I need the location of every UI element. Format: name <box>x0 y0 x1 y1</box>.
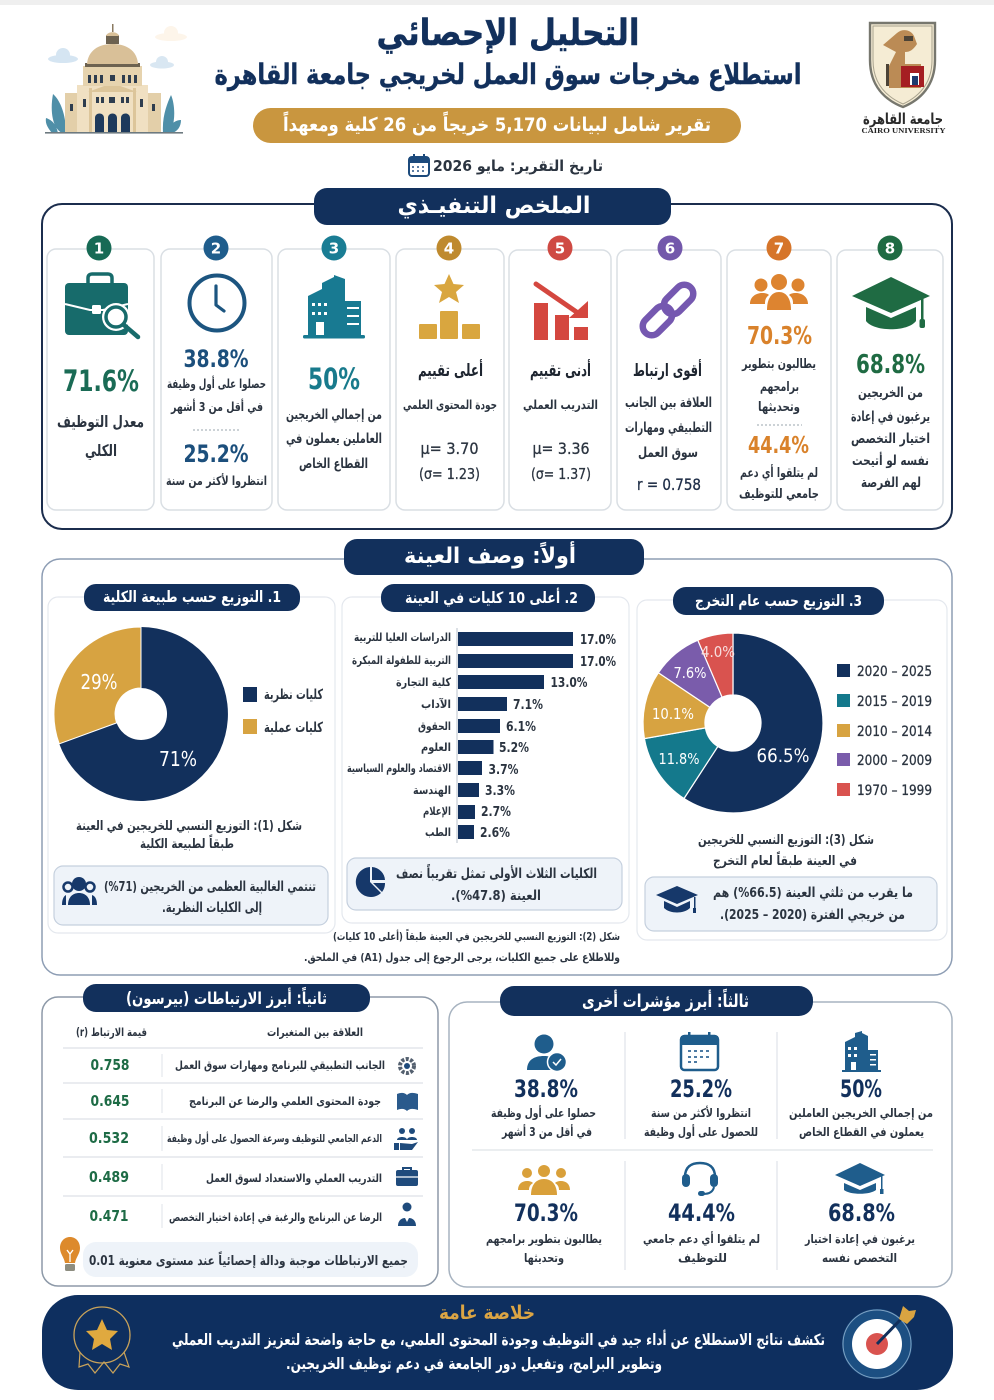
heading: sample description <box>344 539 644 575</box>
icon: calendar <box>409 154 429 176</box>
callout: two thirds recent graduates <box>645 877 937 931</box>
callout: top three colleges <box>347 858 622 910</box>
text: would re-choose specialisation: من الخريجين <box>858 385 923 401</box>
bar chart: top ten colleges: 2.6% <box>480 825 510 841</box>
label: overall employment: معدل التوظيف <box>57 412 144 431</box>
heading: pearson correlations: ثانياً: أبرز الارتباطات (بيرسون) <box>126 986 327 1009</box>
chart panel 3: by graduation year <box>637 587 947 940</box>
icon: user with check <box>527 1034 566 1072</box>
bar chart: top ten colleges: الحقوق <box>418 719 451 734</box>
text: first job within three months <box>167 375 266 414</box>
indicator: re-choose specialisation 68.8%: يرغبون في إعادة اختيار <box>804 1232 915 1247</box>
heading: pearson correlations <box>83 984 370 1012</box>
label: scientific content quality: جودة المحتوى العلمي <box>403 397 497 412</box>
heading: executive summary: الملخص التنفيـذي <box>398 193 590 219</box>
card 2: time to first job: 2 <box>211 240 221 258</box>
icon: light bulb <box>60 1237 80 1271</box>
icon: briefcase <box>396 1168 418 1186</box>
caption: figure 1 <box>76 819 302 852</box>
heading: by graduation year <box>673 587 884 615</box>
row: content quality and satisfaction: 0.645 <box>90 1092 130 1110</box>
illustration: university building <box>45 24 187 134</box>
card 6: strongest correlation <box>617 236 721 510</box>
card 5: lowest rating <box>509 236 611 510</box>
indicator: program development 70.3%: يطالبون بتطوير برامجهم <box>486 1232 602 1247</box>
row: satisfaction and re-choosing: الرضا عن البرنامج والرغبة في إعادة اختيار التخصص <box>169 1211 382 1224</box>
callout: top three colleges: الكليات الثلاث الأولى تمثل تقريباً نصف <box>396 863 597 882</box>
footnote: figure 2 <box>304 929 620 964</box>
row: satisfaction and re-choosing <box>90 1202 416 1226</box>
gold subtitle pill: تقرير شامل لبيانات 5,170 خريجاً من 26 كلية ومعهداً <box>283 111 711 136</box>
bar chart: top ten colleges: 17.0% <box>580 654 616 670</box>
card 6: strongest correlation: 6 <box>665 240 675 258</box>
legend: college type: كليات نظرية <box>264 687 324 703</box>
value: 70.3%: 70.3% <box>747 321 812 350</box>
row: practical side and market skills: الجانب التطبيقي للبرنامج ومهارات سوق العمل <box>175 1058 385 1073</box>
indicator: first job within three months 38.8%: حصلوا على أول وظيفة <box>491 1105 596 1121</box>
bar chart: top ten colleges <box>347 628 616 843</box>
value: 50%: 50% <box>308 362 360 396</box>
callout: top three colleges: العينة (47.8%). <box>451 888 541 904</box>
stats: mean and deviation <box>419 439 480 483</box>
text: first job within three months: حصلوا على أول وظيفة <box>167 375 266 391</box>
row: practical side and market skills: 0.758 <box>90 1056 130 1074</box>
indicator: private sector 50%: يعملون في القطاع الخاص <box>799 1125 924 1140</box>
text: first job within three months: في أقل من 3 أشهر <box>170 398 263 414</box>
bar chart: top ten colleges: الهندسة <box>413 783 451 797</box>
donut chart: graduation year: 10.1% <box>652 705 694 723</box>
caption: figure 1: طبقاً لطبيعة الكلية <box>140 834 234 852</box>
heading: other key indicators: ثالثاً: أبرز مؤشرات أخرى <box>582 988 749 1012</box>
stats: mean and deviation: (σ= 1.23) <box>419 465 480 483</box>
title: التحليل الإحصائي <box>376 13 640 54</box>
indicator: private sector 50% <box>789 1031 933 1140</box>
logo arabic name: جامعة القاهرة <box>863 110 943 128</box>
panel: other key indicators <box>449 986 952 1287</box>
legend: graduation year: 2020 – 2025 <box>857 664 932 680</box>
icon: graduation cap <box>835 1163 885 1194</box>
legend: college type: كليات عملية <box>264 720 324 736</box>
indicator: re-choose specialisation 68.8%: 68.8% <box>828 1199 895 1227</box>
icon: chain link <box>639 281 697 339</box>
callout: two thirds recent graduates: من خريجي الفترة (2020 – 2025). <box>720 907 905 923</box>
caption: figure 1: شكل (1): التوزيع النسبي للخريجين في العينة <box>76 819 302 834</box>
bar chart: top ten colleges: العلوم <box>421 740 451 755</box>
logo: Cairo University <box>862 23 946 135</box>
donut chart: graduation year: 11.8% <box>658 750 700 768</box>
card 5: lowest rating: 5 <box>555 240 565 258</box>
text: conclusion <box>172 1330 825 1374</box>
indicator: no university support 44.4% <box>643 1163 760 1266</box>
stats: mean and deviation: (σ= 1.37) <box>531 465 591 483</box>
icon: open book <box>397 1093 418 1111</box>
card 2: time to first job <box>161 236 272 510</box>
text: practical side and labour market skills: سوق العمل <box>638 445 698 461</box>
bar chart: top ten colleges: التربية للطفولة المبكرة <box>352 653 451 668</box>
card 7: program development: 7 <box>774 240 784 258</box>
callout: theoretical majority <box>54 866 328 925</box>
stats: mean and deviation: μ= 3.70 <box>420 439 478 458</box>
card 3: private sector <box>278 236 390 510</box>
heading: sample description: أولاً: وصف العينة <box>404 540 576 569</box>
donut chart: graduation year: 7.6% <box>674 664 706 682</box>
donut chart: graduation year <box>643 633 823 813</box>
report date: تاريخ التقرير: مايو 2026 <box>433 157 603 175</box>
indicator: waited over a year 25.2%: للحصول على أول وظيفة <box>644 1124 758 1140</box>
caption: figure 3: شكل (3): التوزيع النسبي للخريجين <box>698 833 874 848</box>
indicator: re-choose specialisation 68.8% <box>804 1163 915 1265</box>
legend: graduation year: 1970 – 1999 <box>857 783 932 799</box>
logo english name: CAIRO UNIVERSITY <box>862 126 946 135</box>
indicator: waited over a year 25.2%: انتظروا لأكثر من سنة <box>651 1105 751 1121</box>
text: would re-choose specialisation: لهم الفرصة <box>861 475 921 491</box>
bar chart: top ten colleges: الطب <box>425 825 451 839</box>
text: conclusion: وتطوير البرامج، وتفعيل دور الجامعة في دعم توظيف الخريجين. <box>286 1355 662 1374</box>
donut chart: college type <box>54 627 228 801</box>
table header <box>76 1025 363 1039</box>
icon: clock <box>190 276 244 330</box>
text: demand program development <box>741 357 816 415</box>
bar chart: top ten colleges: 3.7% <box>488 762 519 778</box>
row: practical training and readiness: 0.489 <box>89 1168 129 1186</box>
icon: award badge <box>74 1307 130 1373</box>
card 4: highest rating <box>396 236 504 510</box>
panel: executive summary <box>42 188 952 529</box>
row: university support and time to job: 0.532 <box>89 1129 129 1147</box>
row: university support and time to job <box>89 1128 418 1150</box>
footnote: figure 2: شكل (2): التوزيع النسبي للخريجين في العينة طبقاً (أعلى 10 كليات) <box>333 929 620 943</box>
indicator: program development 70.3%: 70.3% <box>514 1199 578 1227</box>
legend: college type <box>243 687 324 736</box>
chart panel 2: top ten colleges <box>304 584 629 964</box>
text: practical side and labour market skills <box>625 395 712 461</box>
icon: calendar <box>681 1032 718 1070</box>
icon: graduation cap <box>656 886 698 913</box>
indicator: no university support 44.4%: لم يتلقوا أي دعم جامعي <box>643 1231 760 1247</box>
label continuation: الكلي <box>85 441 117 461</box>
heading: lowest rating: أدنى تقييم <box>530 359 591 381</box>
text: private sector share <box>286 407 382 472</box>
text: would re-choose specialisation: نفسه لو أتيحت <box>852 452 929 469</box>
card 4: highest rating: 4 <box>444 240 454 258</box>
heading: other key indicators <box>500 986 813 1016</box>
legend: graduation year <box>837 664 932 799</box>
icon: gear <box>400 1059 414 1073</box>
legend: graduation year: 2015 – 2019 <box>857 694 932 710</box>
heading: top ten colleges: 2. أعلى 10 كليات في العينة <box>405 588 578 608</box>
row: university support and time to job: الدعم الجامعي للتوظيف وسرعة الحصول على أول وظيفة <box>167 1131 382 1145</box>
card 8: re-choosing specialisation: 8 <box>885 240 895 258</box>
card 8: re-choosing specialisation <box>837 236 943 510</box>
stats: mean and deviation: μ= 3.36 <box>532 439 590 458</box>
note: significance <box>60 1237 418 1277</box>
bar chart: top ten colleges: 3.3% <box>485 783 515 799</box>
panel: pearson correlations <box>42 984 438 1286</box>
card 7: program development <box>727 236 831 510</box>
bar chart: top ten colleges: 17.0% <box>580 632 616 648</box>
icon: graduation cap <box>852 277 930 329</box>
indicator: private sector 50%: من إجمالي الخريجين العاملين <box>789 1106 933 1120</box>
donut chart: college type: 71% <box>159 747 197 771</box>
icon: buildings <box>842 1031 881 1072</box>
value: 25.2%: 25.2% <box>184 440 248 468</box>
value: 71.6%: 71.6% <box>63 364 139 398</box>
text: waited over a year: انتظروا لأكثر من سنة <box>166 473 267 488</box>
heading: conclusion: خلاصة عامة <box>439 1302 535 1324</box>
indicator: program development 70.3% <box>486 1165 602 1266</box>
heading: by college type: 1. التوزيع حسب طبيعة الكلية <box>103 588 281 606</box>
indicator: private sector 50%: 50% <box>840 1075 882 1103</box>
value: 38.8%: 38.8% <box>184 345 248 373</box>
icon: star podium <box>419 274 480 339</box>
indicator: program development 70.3%: وتحديثها <box>524 1251 564 1266</box>
heading: by college type <box>84 584 300 611</box>
bar chart: top ten colleges: 6.1% <box>506 719 536 735</box>
icon: falling chart <box>534 284 588 340</box>
bar chart: top ten colleges: الاقتصاد والعلوم السياسية <box>347 761 451 776</box>
icon: graduate group <box>398 1202 416 1226</box>
bar chart: top ten colleges: 13.0% <box>550 675 588 691</box>
text: no university support <box>739 464 819 502</box>
icon: people <box>518 1165 570 1195</box>
heading: top ten colleges <box>381 584 595 612</box>
caption: figure 3 <box>698 833 874 869</box>
banner: overall conclusion <box>42 1295 953 1390</box>
bar chart: top ten colleges: الإعلام <box>423 804 451 818</box>
label: practical training: التدريب العملي <box>523 397 598 412</box>
row: practical training and readiness <box>89 1168 418 1186</box>
card 1: employment rate: 1 <box>94 240 104 258</box>
donut chart: graduation year: 4.0% <box>701 643 735 661</box>
text: demand program development: يطالبون بتطوير <box>741 357 816 372</box>
icon: target with arrow <box>842 1306 916 1379</box>
panel: sample description <box>42 539 952 975</box>
bar chart: top ten colleges: 7.1% <box>513 697 543 713</box>
callout: theoretical majority: إلى الكليات النظرية. <box>162 900 262 916</box>
text: would re-choose specialisation: اختيار التخصص <box>851 431 930 447</box>
text: private sector share: العاملين يعملون في <box>286 431 382 447</box>
text: private sector share: من إجمالي الخريجين <box>286 407 382 423</box>
heading: executive summary <box>314 188 671 225</box>
text: would re-choose specialisation <box>851 385 930 491</box>
footnote: figure 2: وللاطلاع على جميع الكليات، يرجى الرجوع إلى جدول (A1) في الملحق. <box>304 951 620 964</box>
text: private sector share: القطاع الخاص <box>299 456 368 472</box>
row: satisfaction and re-choosing: 0.471 <box>90 1207 128 1225</box>
card 1: employment rate <box>47 236 154 510</box>
value: 44.4%: 44.4% <box>748 433 809 459</box>
text: would re-choose specialisation: يرغبون في إعادة <box>851 409 930 425</box>
subtitle: استطلاع مخرجات سوق العمل لخريجي جامعة القاهرة <box>214 58 802 91</box>
icon: people <box>62 877 97 905</box>
chart panel 1: by college type <box>48 584 335 933</box>
callout: two thirds recent graduates: ما يقرب من ثلثي العينة (66.5%) هم <box>713 885 913 901</box>
indicator: waited over a year 25.2%: 25.2% <box>670 1075 732 1103</box>
stats: mean and deviation <box>531 439 591 483</box>
bar chart: top ten colleges: 2.7% <box>481 804 511 820</box>
text: practical side and labour market skills: العلاقة بين الجانب <box>625 395 712 411</box>
icon: briefcase with magnifier <box>65 274 138 337</box>
gold subtitle pill <box>253 108 741 143</box>
icon: pie chart <box>356 867 385 897</box>
callout: theoretical majority: تنتمي الغالبية العظمى من الخريجين (71%) <box>104 879 316 895</box>
caption: figure 3: في العينة طبقاً لعام التخرج <box>713 851 857 869</box>
icon: helping hand <box>394 1128 418 1150</box>
row: practical side and market skills <box>90 1056 414 1074</box>
bar chart: top ten colleges: كلية التجارة <box>396 675 451 689</box>
text: no university support: لم يتلقوا أي دعم <box>740 464 818 481</box>
legend: graduation year: 2010 – 2014 <box>857 724 932 740</box>
indicator: re-choose specialisation 68.8%: التخصص نفسه <box>822 1251 897 1265</box>
heading: highest rating: أعلى تقييم <box>418 359 483 381</box>
indicator: no university support 44.4%: 44.4% <box>668 1199 735 1227</box>
text: no university support: جامعي للتوظيف <box>739 487 819 502</box>
heading: strongest correlation: أقوى ارتباط <box>633 359 702 381</box>
indicator: no university support 44.4%: للتوظيف <box>678 1251 727 1266</box>
text: demand program development: برامجهم <box>760 380 799 395</box>
row: practical training and readiness: التدريب العملي والاستعداد لسوق العمل <box>206 1171 382 1186</box>
bar chart: top ten colleges: الآداب <box>421 697 451 711</box>
value: 68.8%: 68.8% <box>856 350 925 380</box>
indicator: first job within three months 38.8%: في أقل من 3 أشهر <box>501 1124 592 1139</box>
text: practical side and labour market skills: التطبيقي ومهارات <box>625 420 712 436</box>
donut chart: graduation year: 66.5% <box>756 745 810 767</box>
card 3: private sector: 3 <box>329 240 339 258</box>
stat: r value: r = 0.758 <box>637 475 701 494</box>
icon: people <box>750 274 808 310</box>
bar chart: top ten colleges: الدراسات العليا للتربية <box>354 630 451 644</box>
table header: قيمة الارتباط (r) <box>76 1025 147 1039</box>
icon: headset <box>682 1163 718 1196</box>
icon: buildings <box>303 275 365 338</box>
text: demand program development: وتحديثها <box>758 400 800 415</box>
indicator: waited over a year 25.2% <box>644 1032 758 1140</box>
table header: العلاقة بين المتغيرات <box>267 1025 363 1039</box>
indicator: first job within three months 38.8% <box>491 1034 596 1139</box>
donut chart: college type: 29% <box>80 670 118 694</box>
note: significance: جميع الارتباطات موجبة ودالة إحصائياً عند مستوى معنوية 0.01 <box>89 1251 408 1269</box>
indicator: first job within three months 38.8%: 38.8% <box>514 1075 578 1103</box>
row: content quality and satisfaction <box>90 1092 418 1111</box>
heading: by graduation year: 3. التوزيع حسب عام التخرج <box>695 592 862 610</box>
row: content quality and satisfaction: جودة المحتوى العلمي والرضا عن البرنامج <box>189 1094 381 1109</box>
legend: graduation year: 2000 – 2009 <box>857 753 932 769</box>
bar chart: top ten colleges: 5.2% <box>499 740 529 756</box>
